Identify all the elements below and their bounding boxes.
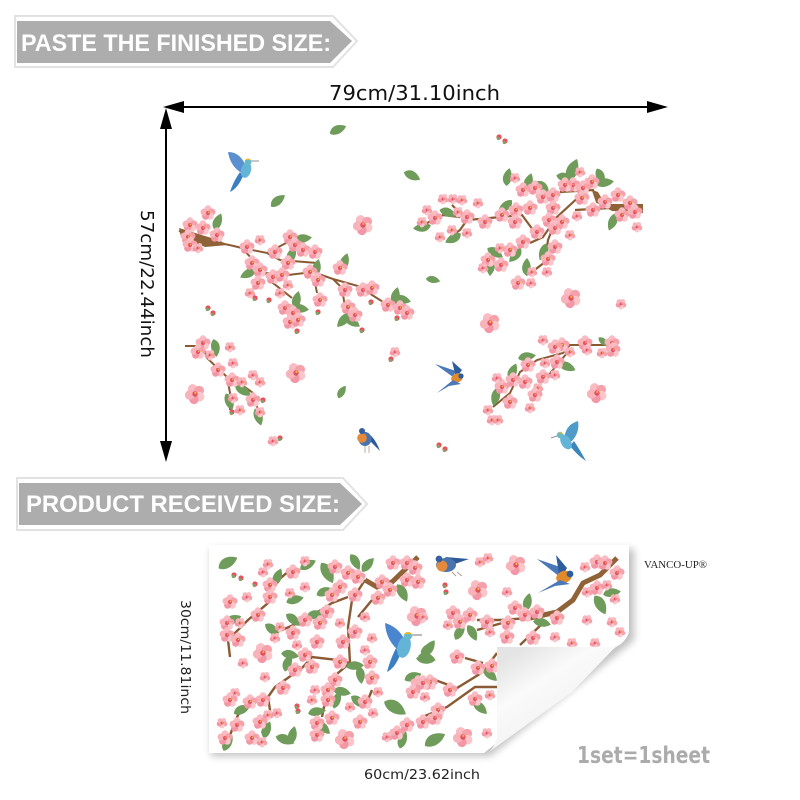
width label: 79cm/31.10inch (329, 81, 500, 105)
banner: product received size (17, 478, 367, 530)
branch: upper left blossom (179, 205, 414, 334)
banner: paste the finished size (15, 16, 357, 67)
set quantity note: 1set=1sheet (577, 743, 710, 769)
branch: lower left blossom (185, 335, 268, 427)
sheet height label: 30cm/11.81inch (177, 600, 192, 714)
dimension arrow: width (163, 101, 668, 113)
brand label: VANCO-UP® (644, 560, 707, 571)
peeled corner (489, 636, 626, 752)
sheet blossoms (215, 550, 628, 752)
printed artwork (215, 550, 628, 753)
sheet bird: robin (436, 556, 469, 576)
banner: paste the finished size: PASTE THE FINISHED SIZE: (21, 30, 331, 57)
sheet base (209, 545, 629, 753)
height label: 57cm/22.44inch (136, 210, 157, 358)
sheet branches (228, 557, 617, 735)
branch: upper right blossom (412, 157, 645, 290)
bird: swallow centre (435, 361, 464, 393)
sheet bird: swallow (537, 555, 574, 593)
sheet leaves (216, 552, 622, 753)
sheet width label: 60cm/23.62inch (364, 768, 480, 783)
dimension arrow: height (160, 108, 172, 462)
sheet shadow (211, 549, 634, 756)
scattered petals, buds and leaves (181, 122, 629, 452)
branch: lower right blossom (481, 332, 620, 427)
bird: hummingbird upper left (228, 152, 259, 192)
banner: product received size: PRODUCT RECEIVED SIZE: (26, 491, 340, 518)
sheet bird: hummingbird (385, 623, 422, 672)
sticker sheet with curled corner (209, 545, 634, 756)
bird: hummingbird lower right (551, 421, 586, 461)
bird: robin bottom (357, 428, 380, 453)
